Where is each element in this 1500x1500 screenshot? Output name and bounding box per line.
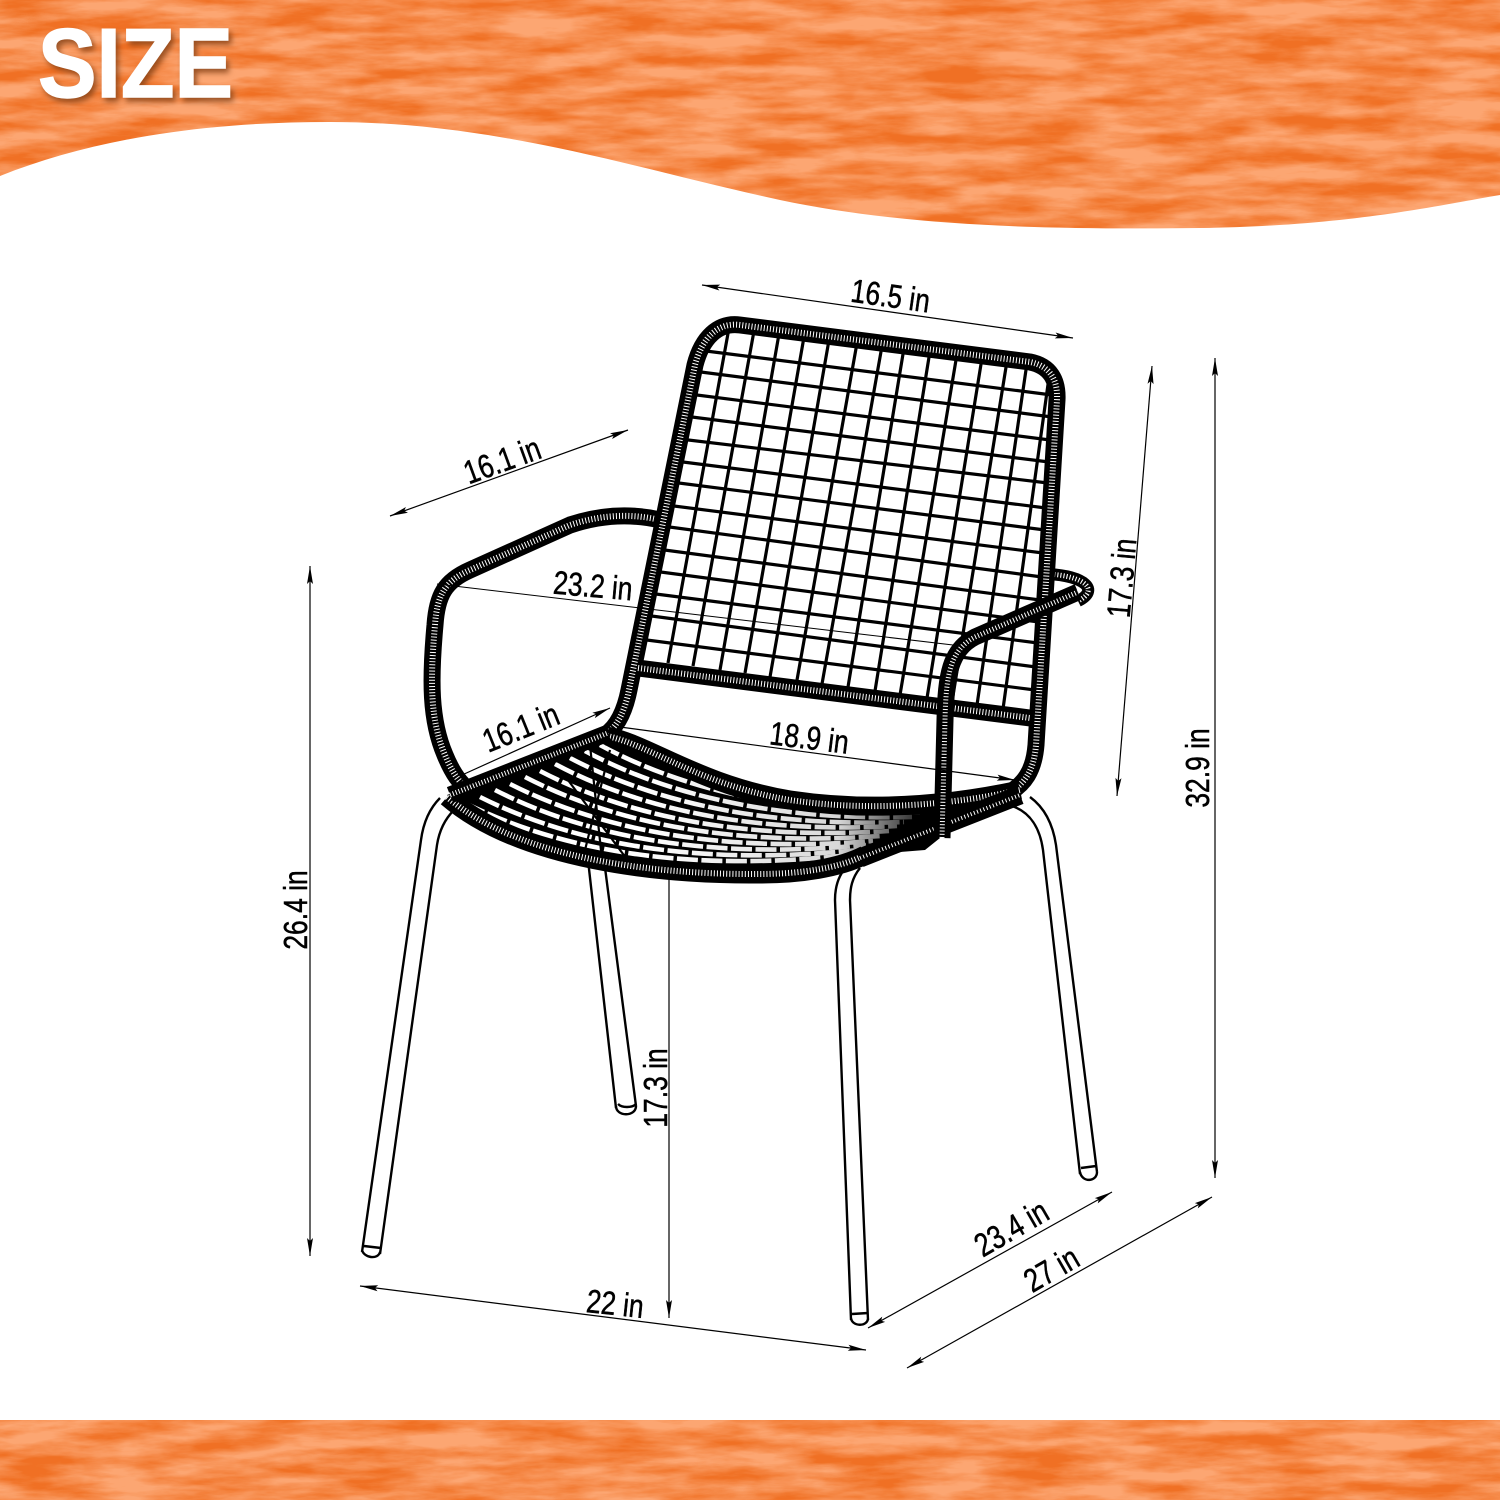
left front leg xyxy=(362,798,454,1257)
seat mesh cells xyxy=(465,745,920,861)
dimension label: 16.1 in armrest: 16.1 in xyxy=(459,430,546,492)
dimension line: back height xyxy=(1117,366,1152,796)
right front leg xyxy=(835,865,868,1325)
dimension line: leg depth xyxy=(868,1192,1112,1328)
right armrest front xyxy=(942,592,1078,838)
dimension lines xyxy=(310,285,1215,1368)
back left leg xyxy=(588,860,636,1114)
dimension line: seat width xyxy=(620,727,1015,780)
dimension line: arm width xyxy=(437,584,953,645)
seat xyxy=(447,730,1025,878)
back right leg xyxy=(1012,797,1097,1180)
dimension label: 18.9 in: 18.9 in xyxy=(768,716,851,762)
right armrest rear section xyxy=(1048,574,1088,601)
dimension label: 23.2 in: 23.2 in xyxy=(552,565,634,608)
dimension line: back width xyxy=(702,285,1073,338)
dimension label: 17.3 in back: 17.3 in xyxy=(1101,537,1144,619)
dimension label: 23.4 in: 23.4 in xyxy=(968,1193,1055,1265)
dimension line: overall depth xyxy=(907,1197,1212,1368)
dimension line: overall height xyxy=(1214,358,1216,1178)
left armrest xyxy=(432,516,660,792)
dimension line: armrest depth xyxy=(390,430,628,516)
dimension label: 26.4 in: 26.4 in xyxy=(278,870,315,950)
back bottom rail xyxy=(638,668,1030,718)
seat edge bands xyxy=(447,733,1020,874)
dimension label: 22 in: 22 in xyxy=(585,1283,645,1326)
dimension label: 16.5 in: 16.5 in xyxy=(849,273,932,320)
title: SIZE xyxy=(38,8,233,118)
dimension label: 16.1 in seat: 16.1 in xyxy=(478,697,565,760)
seat under-crossing strands xyxy=(562,745,626,860)
dimension label: 17.3 in seat: 17.3 in xyxy=(638,1048,675,1128)
chair drawing xyxy=(362,325,1097,1325)
dimension line: arm height xyxy=(309,566,311,1256)
back mesh grid xyxy=(639,328,1052,709)
dimension label: 27 in: 27 in xyxy=(1018,1240,1086,1300)
dimension line: front width xyxy=(360,1286,866,1350)
dimension label: 32.9 in: 32.9 in xyxy=(1180,728,1217,808)
dimension line: seat depth xyxy=(462,708,610,775)
back frame xyxy=(605,325,1057,795)
dimension line: seat height xyxy=(668,870,670,1318)
